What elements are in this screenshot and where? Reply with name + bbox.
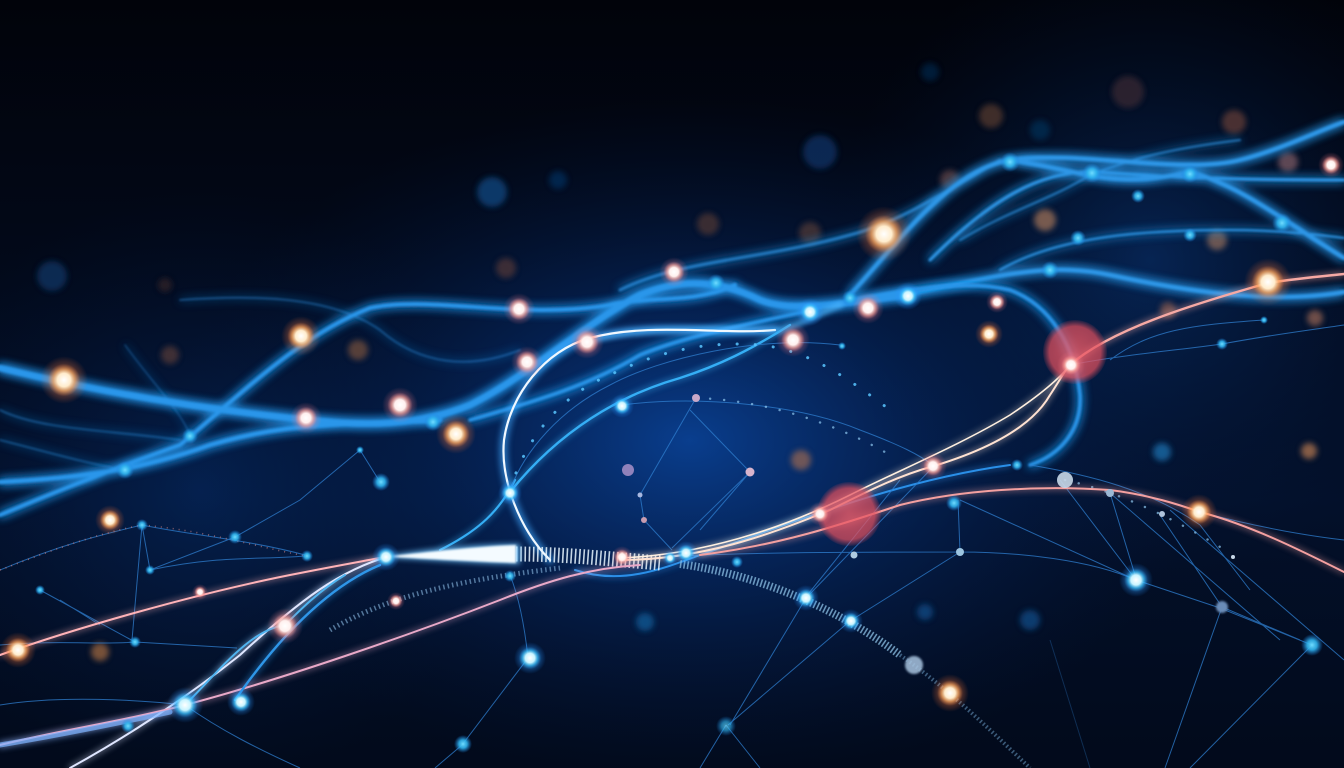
pink and white strands	[0, 274, 1344, 768]
pink glowing nodes	[192, 152, 1344, 644]
central bright beam	[385, 544, 520, 564]
small cyan nodes	[35, 152, 1323, 753]
blue glowing nodes	[167, 282, 1153, 723]
central white loop and bright strands	[440, 305, 1010, 576]
dotted arcs	[0, 344, 1225, 768]
blue thin network lines	[0, 320, 1344, 768]
orange glowing nodes	[0, 206, 1292, 712]
thick blurred upper-right fibres	[620, 122, 1344, 297]
translucent red circles	[817, 320, 1107, 546]
thick blurred left fibres	[0, 284, 1080, 515]
bokeh: out-of-focus background dots	[37, 63, 1323, 661]
grey and lilac nodes	[622, 394, 1235, 674]
